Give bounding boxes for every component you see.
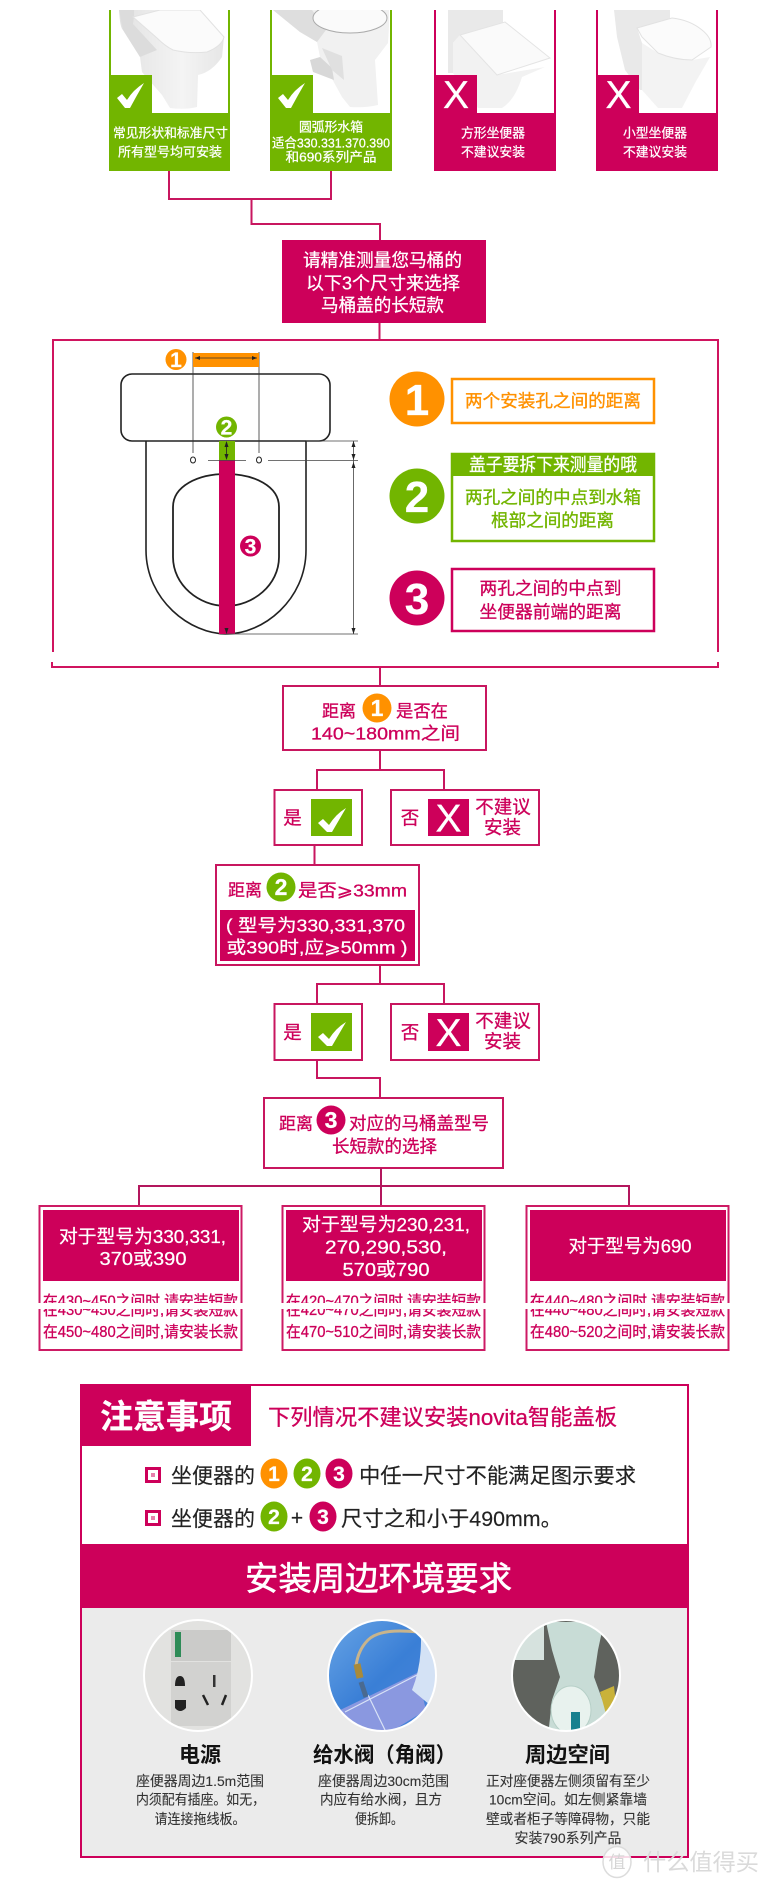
card: curved tank, selected models: 圆弧形水箱: [299, 120, 363, 134]
model card: 330 series: 对于型号为330,331,: [59, 1226, 226, 1247]
legend 1: [390, 372, 654, 426]
column: power: 内须配有插座。如无，: [136, 1792, 265, 1808]
card: square toilet, not recommended: X: [443, 74, 469, 117]
model card: 330 series: [40, 1206, 242, 1350]
column: water valve: [313, 1744, 456, 1827]
heading: measure three dimensions: 马桶盖的长短款: [321, 296, 444, 316]
arrow: branch yes/no 1: [317, 750, 444, 790]
no box 2: 不建议: [475, 1010, 531, 1032]
model card: 230 series: 570或790: [342, 1259, 430, 1280]
arrow: yes to distance 3: [317, 1060, 380, 1098]
column: surrounding space: 安装790系列产品: [514, 1830, 622, 1846]
card: common toilet shape, installable: [109, 10, 230, 171]
no box 2: 否: [401, 1022, 419, 1043]
arrow: branch yes/no 2: [317, 965, 444, 1004]
card: small toilet, not recommended: 不建议安装: [623, 144, 687, 160]
model card: 230 series: 270,290,530,: [325, 1236, 447, 1258]
subtitle: 下列情况不建议安装novita智能盖板: [268, 1405, 617, 1430]
flow box: distance 3: [264, 1098, 503, 1168]
heading: notes: [80, 1384, 251, 1446]
flow box: distance 1: 1: [371, 695, 384, 721]
model card: 690: 在440~480之间时,请安装短款: [530, 1301, 725, 1319]
heading: measure three dimensions: [282, 240, 486, 323]
card: common toilet shape, installable: 所有型号均可安装: [118, 144, 222, 160]
yes box 2: [274, 1004, 362, 1060]
column: water valve: 内应有给水阀，且方: [320, 1792, 442, 1808]
no box 1: X: [435, 798, 462, 840]
no box 1: 否: [401, 808, 419, 828]
legend 2: 盖子要拆下来测量的哦: [469, 455, 637, 475]
arrow: connector from green cards to heading: [169, 171, 380, 240]
yes box 1: [274, 790, 362, 845]
legend 3: 两孔之间的中点到: [480, 578, 622, 598]
note line 1: 坐便器的: [171, 1465, 255, 1488]
watermark: [603, 1846, 759, 1878]
column: water valve: 便拆卸。: [355, 1811, 403, 1827]
note line 2: 坐便器的: [171, 1508, 255, 1531]
note line 2: 尺寸之和小于490mm。: [341, 1508, 562, 1531]
note line 1: 中任一尺寸不能满足图示要求: [359, 1465, 636, 1488]
marker 1: 1: [170, 349, 182, 372]
model card: 330 series: 在450~480之间时,请安装长款: [43, 1323, 238, 1341]
column: power: 电源: [179, 1744, 221, 1767]
note line 2: [146, 1502, 562, 1532]
arrow: branch to three model cards: [139, 1168, 629, 1206]
column: power: 座便器周边1.5m范围: [136, 1773, 264, 1789]
card: curved tank, selected models: 适合330.331.370.390: [272, 136, 390, 150]
legend 2: 2: [405, 473, 429, 522]
note line 2: 2: [268, 1506, 280, 1529]
model card: 690: 在440~480之间时,请安装短款: [530, 1292, 725, 1310]
column: surrounding space: 10cm空间。如左侧紧靠墙: [489, 1792, 647, 1808]
legend 2: 根部之间的距离: [491, 510, 614, 530]
card: curved tank, selected models: 和690系列产品: [286, 150, 376, 164]
column: surrounding space: [486, 1743, 650, 1846]
photo: power socket: [140, 1618, 256, 1734]
model card: 330 series: 370或390: [100, 1248, 186, 1269]
marker 3: [240, 536, 261, 558]
flow box: distance 1: 是否在: [396, 702, 448, 721]
yes box 1: 是: [283, 808, 302, 828]
photo: surrounding space: [510, 1618, 622, 1736]
note line 2: 3: [317, 1506, 329, 1529]
yes box 2: 是: [283, 1022, 302, 1043]
flow box: distance 1: [283, 686, 486, 750]
card: small toilet, not recommended: X: [605, 74, 632, 117]
photo: angle valve: [325, 1618, 441, 1736]
column: water valve: 给水阀（角阀）: [313, 1744, 456, 1767]
no box 1: 不建议: [475, 796, 531, 818]
arrow: heading to measurement panel: [378, 323, 380, 339]
panel: notes and environment requirements: [80, 1384, 689, 1857]
column: power: 请连接拖线板。: [154, 1811, 246, 1827]
flow box: distance 3: 3: [325, 1107, 337, 1133]
no box 1: 安装: [484, 817, 521, 838]
legend 3: 3: [405, 575, 429, 624]
flow box: distance 3: 对应的马桶盖型号: [349, 1114, 489, 1134]
heading: measure three dimensions: 以下3个尺寸来选择: [306, 274, 460, 294]
note line 1: 1: [268, 1463, 280, 1486]
legend 1: 1: [405, 376, 429, 425]
marker 3: 3: [245, 536, 256, 558]
column: surrounding space: 正对座便器左侧须留有至少: [486, 1773, 650, 1789]
card: square toilet, not recommended: 方形坐便器: [461, 126, 525, 140]
flow box: distance 2: 2: [275, 874, 287, 900]
note line 2: +: [291, 1507, 303, 1530]
heading: installation environment: [80, 1544, 689, 1608]
card: small toilet, not recommended: [596, 10, 718, 171]
toilet outline diagram: [121, 352, 358, 634]
legend 2: 两孔之间的中点到水箱: [465, 488, 641, 508]
column: power: [136, 1744, 265, 1827]
note line 1: 2: [301, 1463, 313, 1486]
model card: 230 series: 在420~470之间时,请安装短款: [286, 1292, 481, 1310]
marker 1: [166, 349, 186, 372]
model card: 690: 在480~520之间时,请安装长款: [530, 1323, 725, 1341]
flow box: distance 2: 距离: [228, 881, 262, 900]
heading: notes: 注意事项: [100, 1398, 232, 1435]
no box 1: [391, 790, 539, 845]
watermark: 值: [608, 1853, 626, 1872]
card: common toilet shape, installable: 常见形状和标准尺寸: [113, 126, 228, 140]
model card: 690: 对于型号为690: [568, 1236, 692, 1256]
marker 2: [216, 416, 237, 440]
no box 2: 安装: [484, 1031, 521, 1052]
card: curved tank, selected models: [270, 3, 392, 171]
arrow: panel to distance 1 check: [379, 667, 381, 686]
model card: 330 series: 在430~450之间时,请安装短款: [43, 1292, 238, 1310]
marker 2: 2: [221, 416, 232, 440]
no box 2: X: [435, 1012, 462, 1055]
panel: measurement diagram: [52, 340, 718, 667]
model card: 230 series: 在420~470之间时,请安装短款: [286, 1301, 481, 1319]
legend 3: 坐便器前端的距离: [480, 602, 622, 622]
flow box: distance 3: 距离: [279, 1114, 313, 1134]
flow box: distance 2: [216, 865, 419, 965]
note line 1: 3: [333, 1463, 345, 1486]
note line 1: [146, 1458, 636, 1488]
environment background: [82, 1608, 687, 1856]
model card: 230 series: [282, 1206, 484, 1350]
column: surrounding space: 壁或者柜子等障碍物，只能: [486, 1811, 650, 1827]
flow box: distance 2: 或390时,应⩾50mm ): [226, 938, 408, 958]
card: square toilet, not recommended: 不建议安装: [461, 144, 525, 160]
no box 2: [391, 1004, 539, 1060]
heading: installation environment: 安装周边环境要求: [245, 1560, 512, 1597]
arrow: yes to distance 2 check: [314, 845, 316, 865]
legend 2: [390, 453, 655, 541]
flow box: distance 1: 140~180mm之间: [311, 724, 460, 744]
flow box: distance 3: 长短款的选择: [332, 1136, 437, 1156]
legend 1: 两个安装孔之间的距离: [465, 391, 641, 411]
watermark: 什么值得买: [643, 1849, 759, 1875]
legend 3: [390, 569, 654, 631]
flow box: distance 2: 是否⩾33mm: [298, 880, 407, 900]
column: surrounding space: 周边空间: [525, 1743, 610, 1767]
card: small toilet, not recommended: 小型坐便器: [623, 126, 687, 140]
flow box: distance 2: ( 型号为330,331,370: [226, 916, 405, 936]
heading: measure three dimensions: 请精准测量您马桶的: [303, 250, 462, 270]
card: square toilet, not recommended: [434, 10, 556, 171]
model card: 690: [526, 1206, 728, 1350]
model card: 330 series: 在430~450之间时,请安装短款: [43, 1301, 238, 1319]
column: water valve: 座便器周边30cm范围: [318, 1773, 449, 1789]
flow box: distance 1: 距离: [322, 702, 356, 721]
model card: 230 series: 对于型号为230,231,: [302, 1214, 470, 1235]
model card: 230 series: 在470~510之间时,请安装长款: [286, 1323, 481, 1341]
